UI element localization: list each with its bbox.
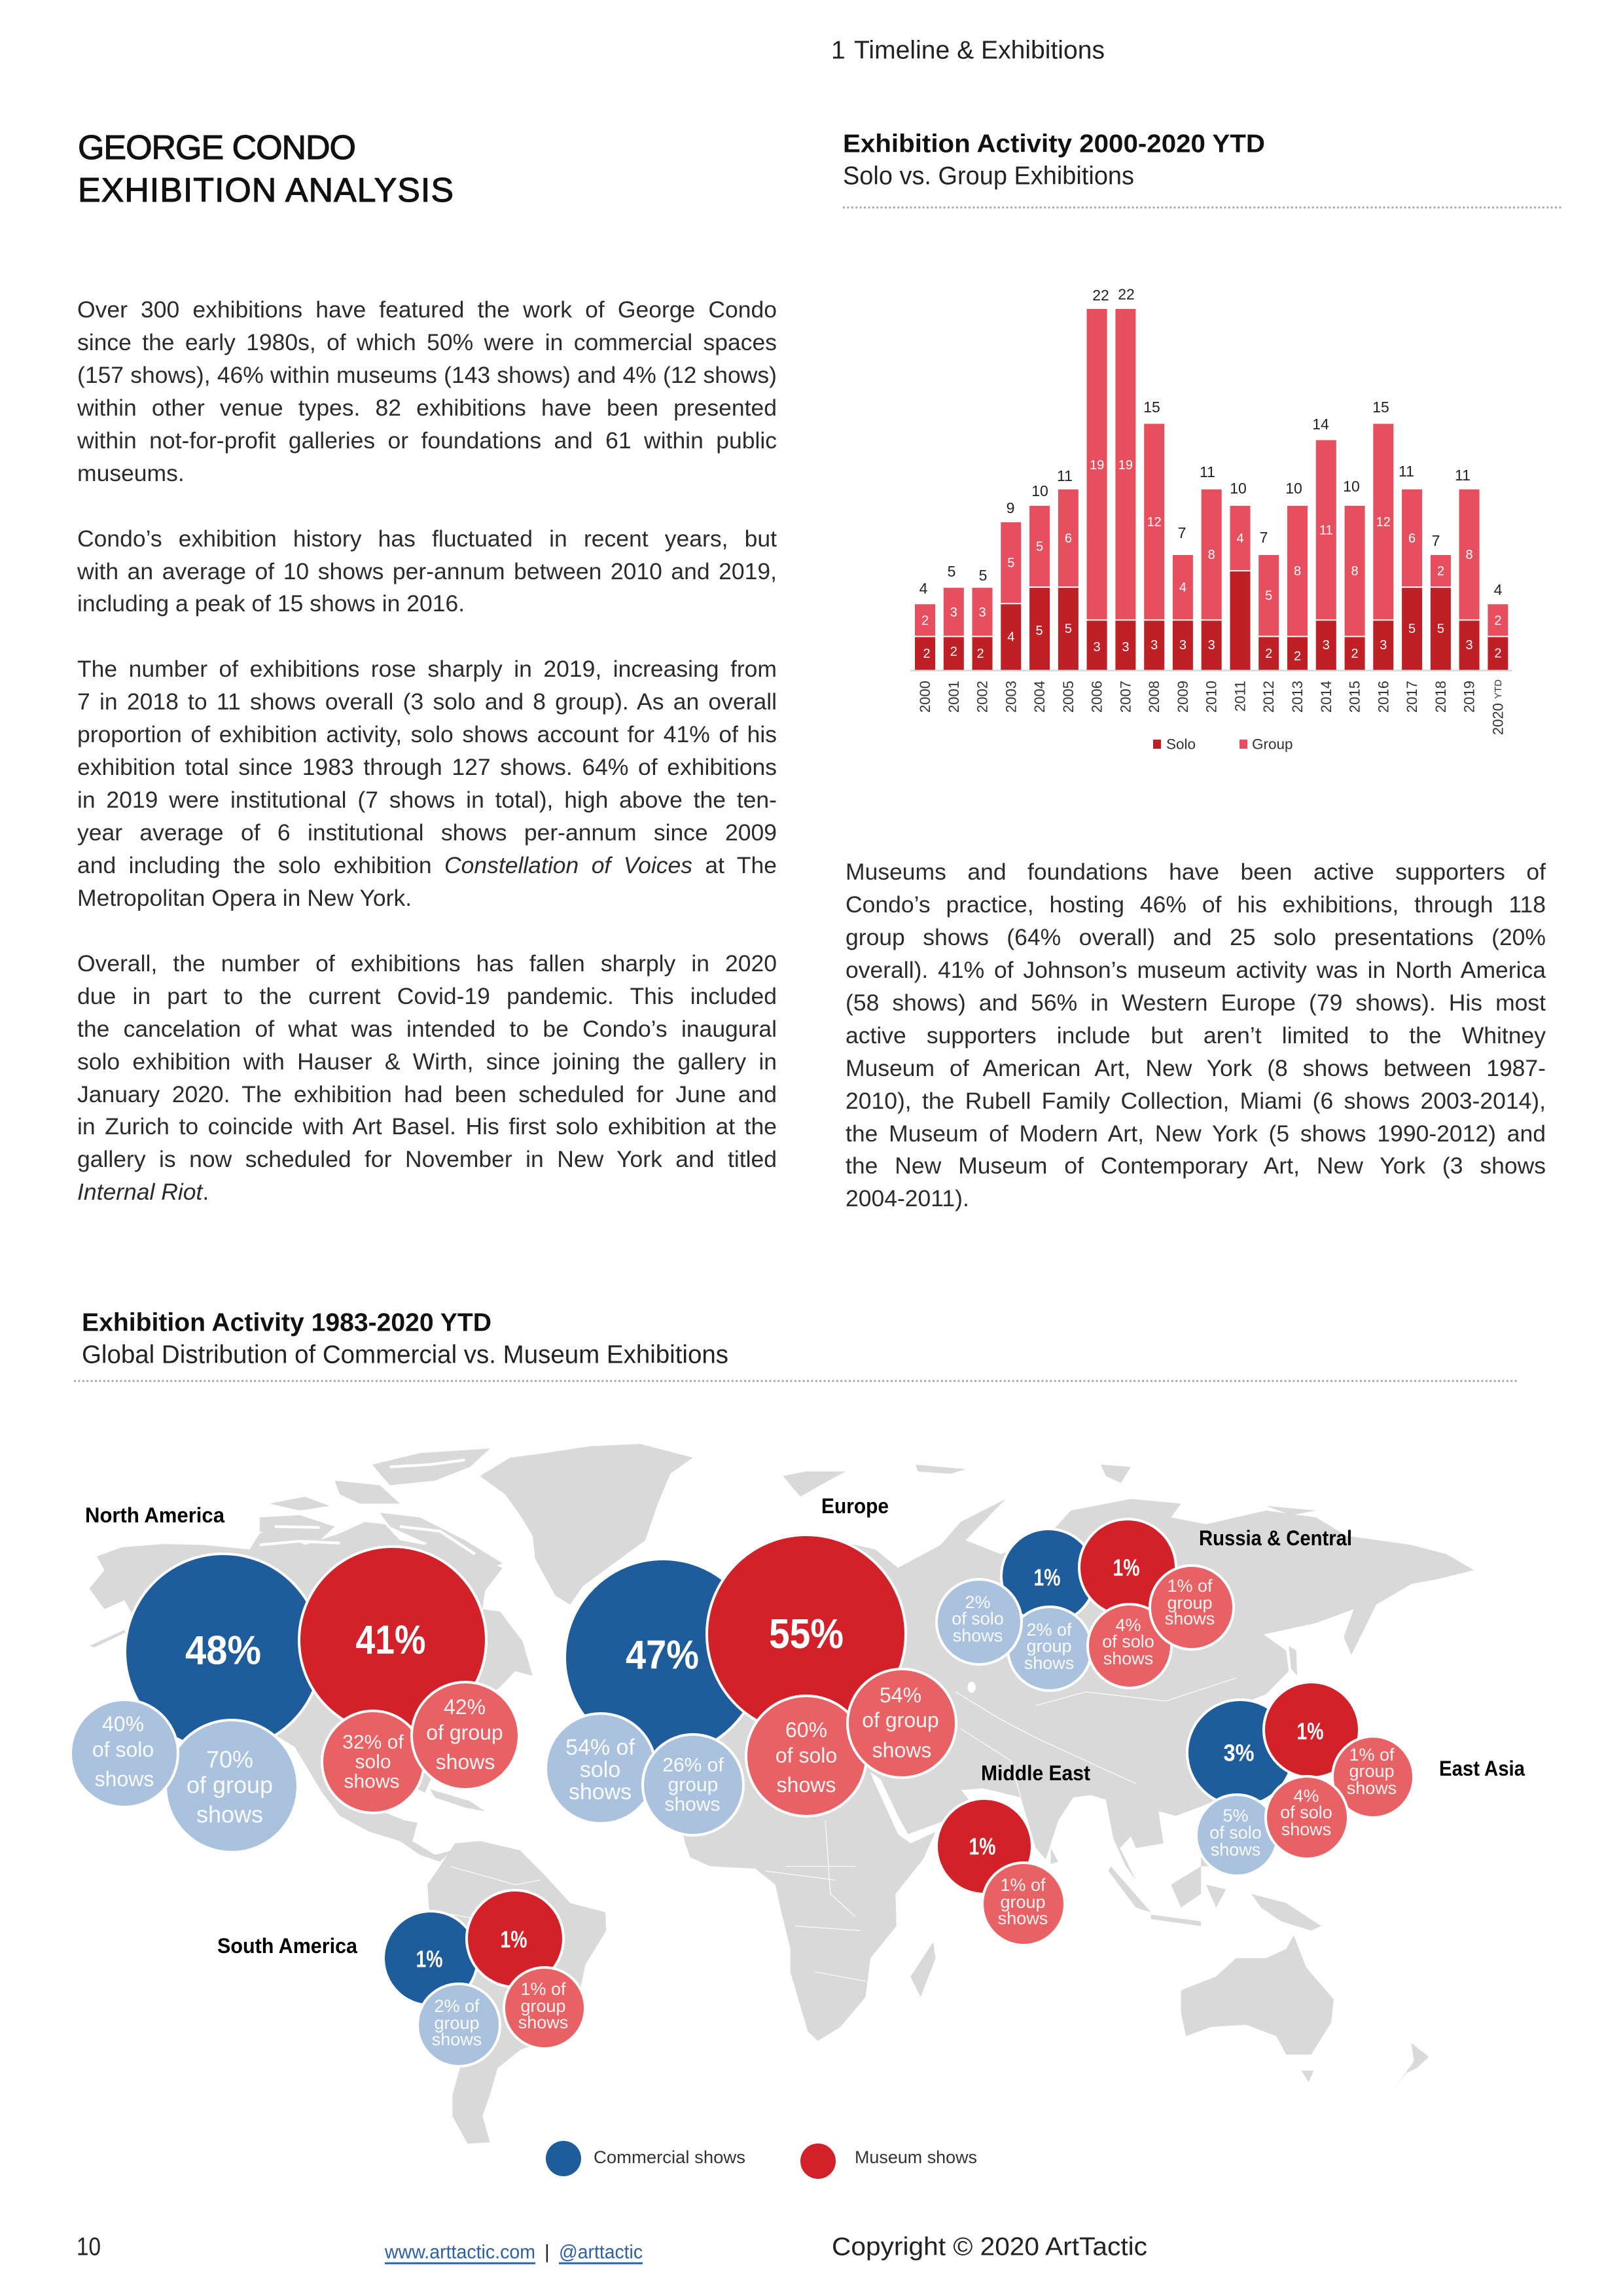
bar 2002: 5 <box>979 567 987 584</box>
region: Europe: of solo <box>776 1744 837 1767</box>
region labels: Europe <box>821 1494 889 1518</box>
chart legend <box>1153 736 1293 753</box>
bar 2009: 2009 <box>1175 681 1191 713</box>
bar 2010 <box>1200 463 1222 713</box>
bar 2017: 6 <box>1408 531 1416 546</box>
bar 2006: 19 <box>1090 458 1104 473</box>
region: South America: group <box>520 1996 566 2016</box>
bar 2008 <box>1143 399 1164 713</box>
region: Russia and Central: shows <box>1024 1653 1074 1673</box>
region: Europe: of group <box>862 1708 939 1732</box>
region: North America: shows <box>95 1767 154 1791</box>
region: East Asia: 1% of <box>1349 1745 1395 1765</box>
bar 2017: 2017 <box>1404 681 1420 713</box>
text block: left column analysis: since the early 1980s, of which 50% were in commercial spaces <box>77 329 777 355</box>
bar 2005: 6 <box>1065 531 1072 546</box>
text block: right column museums: overall). 41% of Johnson’s museum activity was in North America <box>846 957 1546 983</box>
chart legend: Solo <box>1166 736 1196 753</box>
region: South America: 1% <box>416 1945 442 1973</box>
text block: right column museums: the Museum of Modern Art, New York (5 shows 1990-2012) and <box>846 1121 1546 1147</box>
bar 2020 YTD <box>1488 581 1508 735</box>
bar 2012: 5 <box>1265 589 1272 603</box>
region: Russia and Central: shows <box>953 1626 1003 1645</box>
bar 2003: 9 <box>1007 499 1014 516</box>
chart legend: Group <box>1252 736 1293 753</box>
region labels: East Asia <box>1439 1757 1525 1780</box>
region: Europe: 55% <box>769 1610 844 1657</box>
bar 2008: 3 <box>1150 638 1158 653</box>
region: Russia and Central: shows <box>1165 1609 1215 1628</box>
bar 2004 <box>1029 482 1050 713</box>
region: North America: of solo <box>92 1738 154 1761</box>
bar 2019 <box>1455 467 1480 713</box>
heading: bar chart section: Exhibition Activity 2000-2020 YTD <box>843 130 1265 158</box>
text block: left column analysis: and including the solo exhibition Constellation of Voices at The <box>77 852 777 878</box>
text block: right column museums: group shows (64% overall) and 25 solo presentations (20% <box>846 924 1546 950</box>
region: East Asia: 3% <box>1224 1740 1254 1766</box>
bar 2012: 7 <box>1260 529 1268 546</box>
region: Russia and Central: of solo <box>1102 1632 1154 1651</box>
footer: page number: 10 <box>77 2233 101 2261</box>
text block: left column analysis: within not-for-profit galleries or foundations and 61 within public <box>77 427 777 454</box>
text block: right column museums: Museum of American Art, New York (8 shows between 1987- <box>846 1055 1546 1081</box>
bar 2004: 5 <box>1035 624 1043 638</box>
bar 2011 <box>1230 480 1250 711</box>
region: Russia and Central: 1% <box>1034 1564 1060 1590</box>
bar 2003: 2003 <box>1003 681 1019 713</box>
region: East Asia: 1% <box>1297 1717 1323 1745</box>
footer: copyright: Copyright © 2020 ArtTactic <box>832 2233 1147 2261</box>
region: Russia and Central: shows <box>1103 1649 1153 1668</box>
footer: links: www.arttactic.com <box>384 2241 535 2263</box>
region: Russia and Central: 1% <box>1113 1554 1140 1581</box>
text block: left column analysis: museums. <box>77 460 185 486</box>
footer: links <box>384 2241 643 2263</box>
bar 2002: 2002 <box>974 681 991 713</box>
bar 2012 <box>1258 529 1279 713</box>
bar 2014 <box>1312 416 1336 713</box>
region: Middle East: 1% of <box>1000 1875 1046 1895</box>
region: Europe: 54% of <box>565 1735 635 1760</box>
region: North America <box>71 1547 519 1852</box>
bar 2014: 2014 <box>1318 681 1334 713</box>
bar 2019: 11 <box>1455 467 1471 484</box>
heading: bar chart section <box>843 130 1265 190</box>
bar 2006 <box>1087 287 1109 713</box>
text block: right column museums: Museums and foundations have been active supporters of <box>846 859 1546 885</box>
bar 2009 <box>1173 524 1193 713</box>
bar 2005 <box>1057 467 1079 713</box>
text block: left column analysis: 7 in 2018 to 11 shows overall (3 solo and 8 group). As an overall <box>77 689 777 715</box>
bar 2004: 10 <box>1031 482 1048 499</box>
map legend: Commercial shows <box>594 2147 745 2167</box>
bar 2007: 3 <box>1122 640 1129 655</box>
bar 2003 <box>1001 499 1021 713</box>
region: North America: of group <box>426 1721 503 1744</box>
bar 2016: 15 <box>1372 399 1389 416</box>
bar 2019: 8 <box>1466 548 1473 562</box>
text block: left column analysis: proportion of exhibition activity, solo shows account for 41% of his <box>77 721 777 747</box>
bar chart: solo vs group exhibitions <box>910 285 1512 753</box>
region labels <box>85 1494 1525 1958</box>
bar 2020 YTD: 2 <box>1494 613 1501 628</box>
bar 2018: 7 <box>1432 532 1440 549</box>
bar 2013: 8 <box>1294 564 1301 579</box>
bar 2014: 3 <box>1323 638 1330 653</box>
bar 2011: 4 <box>1236 531 1244 546</box>
region: Russia and Central: 2% <box>965 1592 991 1612</box>
bar 2010: 3 <box>1208 638 1215 653</box>
bar 2013 <box>1285 480 1308 713</box>
text block: left column analysis: solo exhibition with Hauser & Wirth, since joining the gallery in <box>77 1049 777 1075</box>
region: East Asia: 4% <box>1293 1786 1319 1806</box>
bar 2018: 2 <box>1437 564 1444 579</box>
region: Russia and Central: group <box>1167 1593 1213 1613</box>
bar 2008: 2008 <box>1146 681 1162 713</box>
region: East Asia: of solo <box>1280 1803 1332 1822</box>
bar 2016: 2016 <box>1375 681 1391 713</box>
text block: left column analysis: in 2019 were institutional (7 shows in total), high above the ten- <box>77 787 777 813</box>
region: Middle East <box>936 1799 1065 1945</box>
map legend <box>546 2141 977 2179</box>
bar 2007 <box>1115 285 1135 713</box>
region: East Asia: shows <box>1211 1840 1260 1859</box>
bar 2008: 12 <box>1147 515 1162 529</box>
region: South America: shows <box>518 2013 568 2032</box>
region: North America: 40% <box>102 1712 144 1736</box>
bar 2016 <box>1372 399 1393 713</box>
bar 2008: 15 <box>1143 399 1160 416</box>
bar 2001: 2 <box>950 645 957 659</box>
bar 2007: 2007 <box>1117 681 1133 713</box>
bar 2001: 2001 <box>946 681 962 713</box>
text block: right column museums: Condo’s practice, hosting 46% of his exhibitions, through 118 <box>846 891 1546 918</box>
region labels: South America <box>217 1934 357 1958</box>
bar 2007: 22 <box>1118 285 1135 302</box>
region: North America: solo <box>355 1751 391 1772</box>
bar 2020 YTD: 2 <box>1494 646 1501 660</box>
text block: left column analysis: due in part to the current Covid-19 pandemic. This included <box>77 983 777 1009</box>
bar 2015: 8 <box>1351 564 1359 579</box>
text block: right column museums: 2004-2011). <box>846 1185 969 1211</box>
text block: right column museums: 2010), the Rubell Family Collection, Miami (6 shows 2003-2014), <box>846 1088 1546 1114</box>
bar 2013: 2013 <box>1289 681 1306 713</box>
bar 2012: 2012 <box>1260 681 1277 713</box>
bar 2006: 2006 <box>1089 681 1105 713</box>
region: East Asia: group <box>1349 1761 1395 1781</box>
heading: map section <box>82 1309 728 1369</box>
region: North America: shows <box>344 1771 400 1792</box>
bar 2001: 5 <box>948 563 955 580</box>
bar 2006: 22 <box>1092 287 1109 304</box>
region: East Asia: shows <box>1347 1778 1397 1798</box>
region labels: Middle East <box>981 1761 1090 1785</box>
main title: GEORGE CONDO <box>78 129 356 167</box>
region: North America: shows <box>196 1801 263 1827</box>
bar 2015 <box>1343 478 1365 713</box>
text block: left column analysis: within other venue types. 82 exhibitions have been presented <box>77 395 777 421</box>
region: North America: shows <box>436 1750 495 1774</box>
bar 2002 <box>972 567 992 713</box>
bar 2019: 3 <box>1466 638 1473 653</box>
bar 2012: 2 <box>1265 647 1272 661</box>
bar 2007: 19 <box>1118 458 1133 473</box>
text block: left column analysis: Over 300 exhibitions have featured the work of George Condo <box>77 296 777 323</box>
bar 2005: 11 <box>1057 467 1073 484</box>
bar 2013: 2 <box>1294 649 1301 664</box>
bar 2005: 2005 <box>1060 681 1077 713</box>
text block: right column museums: the New Museum of Contemporary Art, New York (3 shows <box>846 1153 1546 1179</box>
region: Russia and Central: of solo <box>952 1609 1004 1628</box>
region: Europe: shows <box>664 1793 721 1816</box>
bar 2017: 11 <box>1399 463 1414 480</box>
bar 2000 <box>915 580 935 713</box>
map legend: Museum shows <box>855 2147 977 2167</box>
region: Europe: group <box>668 1774 718 1796</box>
bar 2002: 3 <box>978 605 986 620</box>
bar 2015: 10 <box>1343 478 1360 495</box>
text block: left column analysis: including a peak of 15 shows in 2016. <box>77 590 465 617</box>
region: North America: 70% <box>206 1746 253 1772</box>
region: Europe: 26% of <box>662 1754 724 1776</box>
bar 2009: 4 <box>1179 581 1186 595</box>
bar 2003: 4 <box>1007 630 1014 644</box>
text block: right column museums: active supporters include but aren’t limited to the Whitney <box>846 1022 1546 1049</box>
bar 2020 YTD: 4 <box>1494 581 1503 598</box>
bar 2000: 2 <box>923 647 931 661</box>
region: Europe: solo <box>580 1757 620 1782</box>
bar 2001: 3 <box>950 605 957 620</box>
text block: left column analysis: exhibition total since 1983 through 127 shows. 64% of exhibitions <box>77 754 777 780</box>
bar 2015: 2 <box>1351 647 1359 661</box>
region: Middle East: shows <box>998 1909 1048 1928</box>
text block: left column analysis: gallery is now scheduled for November in New York and titled <box>77 1146 777 1172</box>
region: East Asia: of solo <box>1209 1823 1262 1842</box>
bar 2000: 4 <box>919 580 928 597</box>
bar 2009: 3 <box>1179 638 1186 653</box>
region: South America: 1% of <box>520 1979 566 1999</box>
region: Russia and Central: group <box>1026 1636 1072 1656</box>
bar 2009: 7 <box>1178 524 1186 541</box>
bar 2017 <box>1399 463 1422 713</box>
world map background <box>90 1444 1474 2144</box>
region: South America: 2% of <box>434 1996 480 2016</box>
main title: EXHIBITION ANALYSIS <box>78 171 454 209</box>
region: North America: 48% <box>185 1628 261 1673</box>
bar 2001 <box>944 563 964 713</box>
region: East Asia: shows <box>1281 1820 1331 1839</box>
text block: left column analysis: Condo’s exhibition history has fluctuated in recent years, but <box>77 526 777 552</box>
text block: right column museums: (58 shows) and 56% in Western Europe (79 shows). His most <box>846 990 1546 1016</box>
text block: left column analysis: (157 shows), 46% within museums (143 shows) and 4% (12 shows) <box>77 362 777 388</box>
heading: map section: Exhibition Activity 1983-2020 YTD <box>82 1309 491 1336</box>
text block: left column analysis: year average of 6 institutional shows per-annum since 2009 <box>77 819 777 846</box>
bar 2016: 3 <box>1380 638 1387 653</box>
region: Middle East: 1% <box>969 1833 996 1860</box>
region: Russia and Central: 4% <box>1115 1615 1141 1635</box>
bar 2013: 10 <box>1285 480 1302 497</box>
region: Europe: shows <box>569 1780 632 1804</box>
region: South America: shows <box>432 2030 482 2049</box>
bar 2004: 2004 <box>1031 681 1048 713</box>
main title <box>78 129 454 209</box>
bar 2010: 2010 <box>1204 681 1220 713</box>
bar 2010: 8 <box>1208 548 1215 562</box>
text block: left column analysis <box>77 296 777 1205</box>
bar 2005: 5 <box>1065 622 1072 636</box>
region: Russia and Central <box>936 1519 1234 1691</box>
region: Russia and Central: 1% of <box>1167 1576 1213 1596</box>
bar 2000: 2 <box>921 613 929 628</box>
page header: section name: 1 <box>831 37 846 64</box>
bar 2004: 5 <box>1036 539 1043 554</box>
text block: left column analysis: the cancelation of what was intended to be Condo’s inaugural <box>77 1016 777 1042</box>
text block: left column analysis: January 2020. The exhibition had been scheduled for June and <box>77 1081 777 1107</box>
region: South America: group <box>434 2013 480 2033</box>
bar 2019: 2019 <box>1461 681 1478 713</box>
bar 2011: 10 <box>1230 480 1247 497</box>
bar 2015: 2015 <box>1347 681 1363 713</box>
region: North America: 32% of <box>342 1732 404 1753</box>
text block: right column museums <box>846 859 1546 1211</box>
bar 2014: 11 <box>1319 523 1333 537</box>
heading: map section: Global Distribution of Commercial vs. Museum Exhibitions <box>82 1340 728 1369</box>
footer: links: | <box>544 2241 550 2263</box>
bar 2000: 2000 <box>917 681 933 713</box>
region: North America: of group <box>187 1771 273 1799</box>
bar 2011: 2011 <box>1232 681 1249 711</box>
bar 2010: 11 <box>1200 463 1215 480</box>
bar 2006: 3 <box>1094 640 1101 655</box>
bar 2014: 14 <box>1312 416 1329 433</box>
text block: left column analysis: The number of exhibitions rose sharply in 2019, increasing from <box>77 656 777 682</box>
bar 2002: 2 <box>976 647 984 661</box>
region: East Asia <box>1187 1682 1414 1876</box>
region labels: North America <box>85 1503 224 1527</box>
bar 2003: 5 <box>1007 556 1014 571</box>
region: Russia and Central: 2% of <box>1026 1620 1072 1640</box>
text block: left column analysis: Metropolitan Opera in New York. <box>77 885 412 911</box>
region: Europe: 54% <box>880 1683 921 1707</box>
bar 2020 YTD: 2020 YTD <box>1489 679 1506 735</box>
bar 2018: 2018 <box>1433 681 1449 713</box>
region: Europe: 60% <box>785 1718 827 1742</box>
region: North America: 41% <box>356 1618 425 1662</box>
page header: section name: Timeline & Exhibitions <box>854 37 1105 64</box>
region: Europe <box>546 1535 956 1835</box>
region: North America: 42% <box>444 1695 486 1719</box>
bar 2017: 5 <box>1408 622 1416 636</box>
bar 2018 <box>1431 532 1451 713</box>
text block: left column analysis: with an average of 10 shows per-annum between 2010 and 2019, <box>77 558 777 584</box>
bar 2016: 12 <box>1376 515 1391 529</box>
text block: left column analysis: Internal Riot. <box>77 1179 209 1205</box>
text block: left column analysis: in Zurich to coincide with Art Basel. His first solo exhibition at the <box>77 1113 777 1139</box>
text block: left column analysis: Overall, the number of exhibitions has fallen sharply in 2020 <box>77 950 777 977</box>
region: Europe: shows <box>872 1738 931 1762</box>
footer: links: @arttactic <box>559 2241 643 2263</box>
heading: bar chart section: Solo vs. Group Exhibitions <box>843 162 1134 190</box>
region: Europe: shows <box>777 1773 836 1797</box>
region: Middle East: group <box>1000 1892 1046 1912</box>
region labels: Russia & Central <box>1199 1526 1352 1550</box>
region: South America <box>383 1890 585 2066</box>
bar 2018: 5 <box>1437 622 1444 636</box>
region: Europe: 47% <box>626 1632 699 1678</box>
region: South America: 1% <box>500 1926 527 1953</box>
region: East Asia: 5% <box>1222 1806 1249 1825</box>
